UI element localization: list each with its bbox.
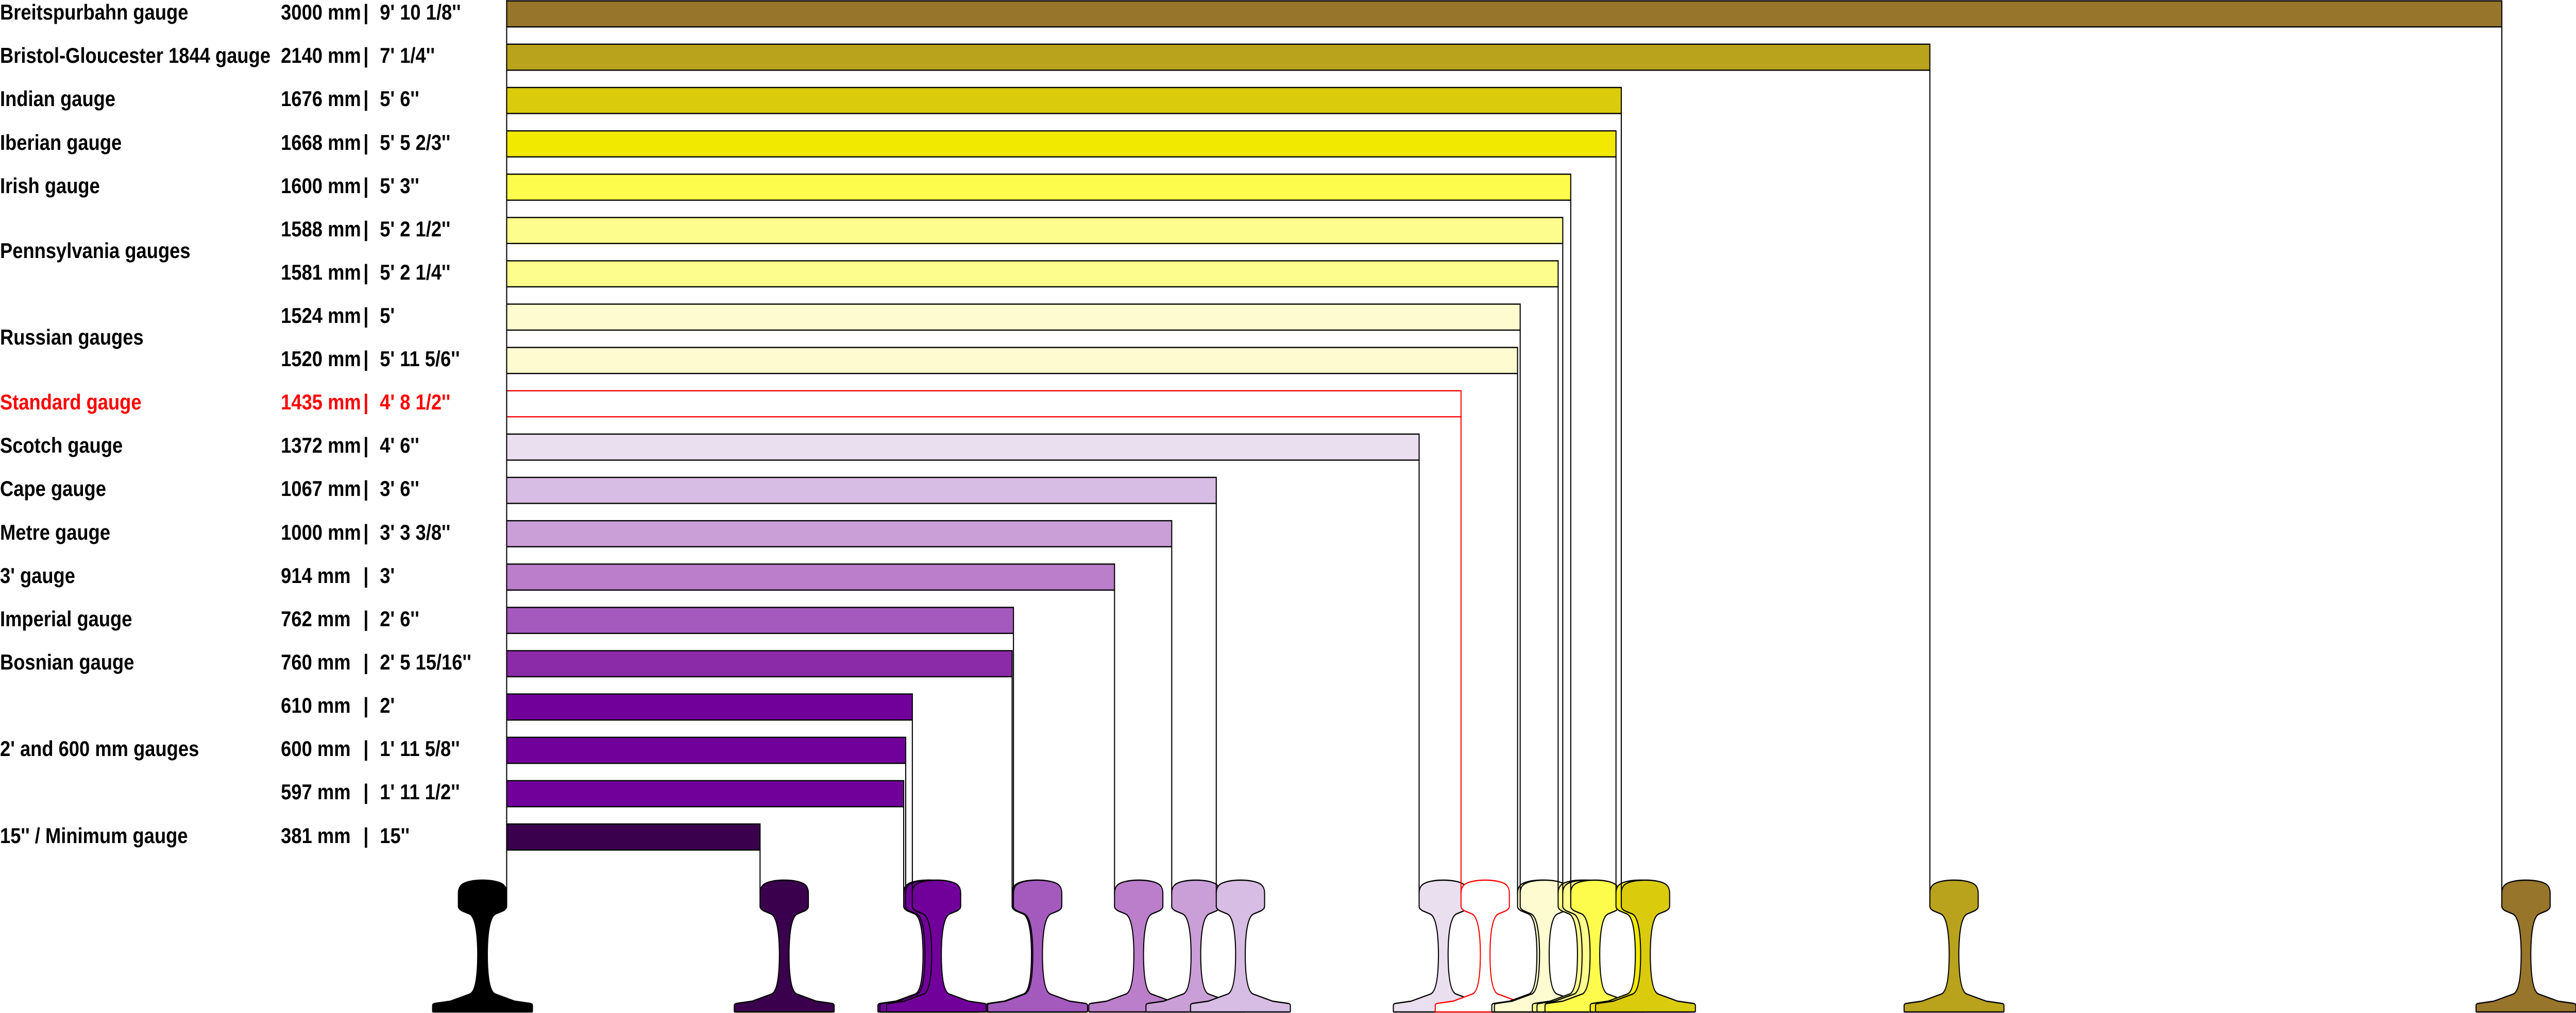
measure: 1676 mm: | [363,87,368,111]
measure: 597 mm: 1' 11 1/2'' [380,780,460,804]
bar: 3000 mm [506,1,2502,27]
rail: 1524 mm [1495,330,1594,1012]
rail: 760 mm [987,677,1086,1012]
bar: 1588 mm [506,217,1563,244]
measure: 381 mm: 15'' [380,824,410,848]
rail: 1000 mm [1146,547,1246,1012]
measure: 597 mm [281,780,460,804]
measure: 1000 mm: 3' 3 3/8'' [380,521,450,545]
label: Pennsylvania: Pennsylvania gauges [0,239,191,263]
rail: 1520 mm [1492,373,1591,1012]
label: Metre: Metre gauge [0,521,110,545]
rail: 1581 mm [1532,287,1632,1012]
bar: 2140 mm [506,44,1930,70]
measure: 762 mm: 762 mm [281,607,351,631]
measure: 1600 mm: | [363,174,368,198]
rail: 3000 mm [2476,27,2576,1012]
measure: 2140 mm: | [363,44,368,68]
measure: 1581 mm: | [363,261,368,285]
measure: 1000 mm: 1000 mm [281,521,361,545]
rail: 1668 mm [1590,157,1690,1012]
measure: 1000 mm: | [363,521,368,545]
label: Indian: Indian gauge [0,87,115,111]
measure: 760 mm: | [363,650,368,675]
label: 2' and 600 mm: 2' and 600 mm gauges [0,737,199,761]
bar: 1668 mm [506,131,1616,157]
measure: 1588 mm: 1588 mm [281,217,361,242]
measure: 600 mm [281,737,460,761]
measure: 1588 mm [281,217,450,242]
measure: 1435 mm standard: 1435 mm [281,390,361,415]
measure: 760 mm: 2' 5 15/16'' [380,650,471,675]
measure: 1588 mm: | [363,217,368,242]
measure: 600 mm: 1' 11 5/8'' [380,737,460,761]
measure: 1524 mm: 5' [380,304,395,328]
measure: 1372 mm: 4' 6'' [380,434,419,458]
bar: 1600 mm [506,174,1571,200]
measure: 762 mm [281,607,419,631]
bar: 381 mm [506,824,760,850]
bar: 1524 mm [506,304,1520,330]
bar: 600 mm [506,737,906,763]
label: 3': 3' gauge [0,564,75,588]
rail: 1067 mm [1191,503,1291,1012]
measure: 600 mm: 600 mm [281,737,351,761]
measure: 914 mm [281,564,395,588]
measure: 597 mm: | [363,780,368,804]
measure: 1668 mm: | [363,131,368,155]
measure: 381 mm: | [363,824,368,848]
gauge measurement labels [281,1,471,848]
gauge bars chart [506,1,2502,850]
measure: 914 mm: 914 mm [281,564,351,588]
measure: 914 mm: | [363,564,368,588]
measure: 2140 mm: 7' 1/4'' [380,44,435,68]
measure: 1676 mm [281,87,419,111]
rail: 597 mm [878,806,978,1012]
measure: 760 mm [281,650,471,675]
label: Cape: Cape gauge [0,477,106,501]
label: Bristol-Gloucester: Bristol-Gloucester 1844 gauge [0,44,270,68]
measure: 1676 mm: 5' 6'' [380,87,419,111]
measure: 1524 mm: | [363,304,368,328]
measure: 1668 mm: 1668 mm [281,131,361,155]
measure: 1520 mm: | [363,347,368,371]
rail: reference left rail [433,0,532,1012]
measure: 610 mm [281,694,395,718]
measure: 1581 mm [281,261,450,285]
label: Iberian: Iberian gauge [0,131,122,155]
measure: 1067 mm: 1067 mm [281,477,361,501]
measure: 1676 mm: 1676 mm [281,87,361,111]
bar: 1000 mm [506,521,1172,547]
measure: 1067 mm [281,477,419,501]
measure: 1435 mm standard: | [363,390,368,415]
bar: 610 mm [506,694,912,720]
bar: 1676 mm [506,88,1621,113]
bar: 1067 mm [506,477,1216,504]
label: Irish: Irish gauge [0,174,100,198]
label: Bosnian: Bosnian gauge [0,650,134,675]
rail: 1588 mm [1537,244,1637,1012]
measure: 1372 mm: | [363,434,368,458]
measure: 1581 mm: 1581 mm [281,261,361,285]
measure: 381 mm [281,824,410,848]
measure: 1520 mm: 1520 mm [281,347,361,371]
label: 15" / Minimum: 15'' / Minimum gauge [0,824,188,848]
measure: 2140 mm [281,44,435,68]
rail: 1435 mm standard [1435,417,1535,1012]
measure: 1372 mm [281,434,419,458]
measure: 3000 mm: 3000 mm [281,1,361,25]
rail: 914 mm [1089,590,1189,1012]
measure: 1524 mm: 1524 mm [281,304,361,328]
rail: 610 mm [887,720,987,1012]
rail: 381 mm [734,850,834,1012]
measure: 1435 mm standard: 4' 8 1/2'' [380,390,450,415]
rail: 1600 mm [1545,200,1645,1012]
measure: 1372 mm: 1372 mm [281,434,361,458]
measure: 610 mm: 610 mm [281,694,351,718]
rail: 2140 mm [1904,70,2004,1012]
bar: 1435 mm standard [506,391,1461,417]
bar: 1372 mm [506,434,1419,460]
measure: 2140 mm: 2140 mm [281,44,361,68]
measure: 381 mm: 381 mm [281,824,351,848]
measure: 597 mm: 597 mm [281,780,351,804]
measure: 1668 mm: 5' 5 2/3'' [380,131,450,155]
measure: 610 mm: | [363,694,368,718]
rail: 762 mm [988,633,1088,1012]
measure: 3000 mm [281,1,461,25]
bar: 1520 mm [506,348,1518,373]
measure: 1668 mm [281,131,450,155]
bar: 597 mm [506,781,904,806]
measure: 1600 mm: 1600 mm [281,174,361,198]
measure: 1067 mm: | [363,477,368,501]
bar: 1581 mm [506,261,1558,287]
measure: 1600 mm [281,174,419,198]
measure: 760 mm: 760 mm [281,650,351,675]
measure: 610 mm: 2' [380,694,395,718]
rail: 600 mm [880,763,980,1012]
measure: 762 mm: | [363,607,368,631]
measure: 3000 mm: | [363,1,368,25]
measure: 1435 mm standard [281,390,450,415]
measure: 1520 mm [281,347,460,371]
bar: 760 mm [506,651,1012,677]
measure: 762 mm: 2' 6'' [380,607,419,631]
measure: 1000 mm [281,521,450,545]
rail: 1372 mm [1393,460,1493,1012]
label: Imperial: Imperial gauge [0,607,132,631]
bar: 762 mm [506,607,1013,633]
measure: 1600 mm: 5' 3'' [380,174,419,198]
bar: 914 mm [506,564,1114,590]
measure: 1067 mm: 3' 6'' [380,477,419,501]
measure: 1520 mm: 5' 11 5/6'' [380,347,460,371]
rail: 1676 mm [1596,113,1696,1012]
label: Standard: Standard gauge [0,390,142,415]
label: Scotch: Scotch gauge [0,434,123,458]
gauge name labels [0,1,270,848]
measure: 3000 mm: 9' 10 1/8'' [380,1,461,25]
measure: 1588 mm: 5' 2 1/2'' [380,217,450,242]
label: Breitspurbahn: Breitspurbahn gauge [0,1,188,25]
label: Russian: Russian gauges [0,325,144,350]
measure: 1581 mm: 5' 2 1/4'' [380,261,450,285]
measure: 914 mm: 3' [380,564,395,588]
measure: 600 mm: | [363,737,368,761]
